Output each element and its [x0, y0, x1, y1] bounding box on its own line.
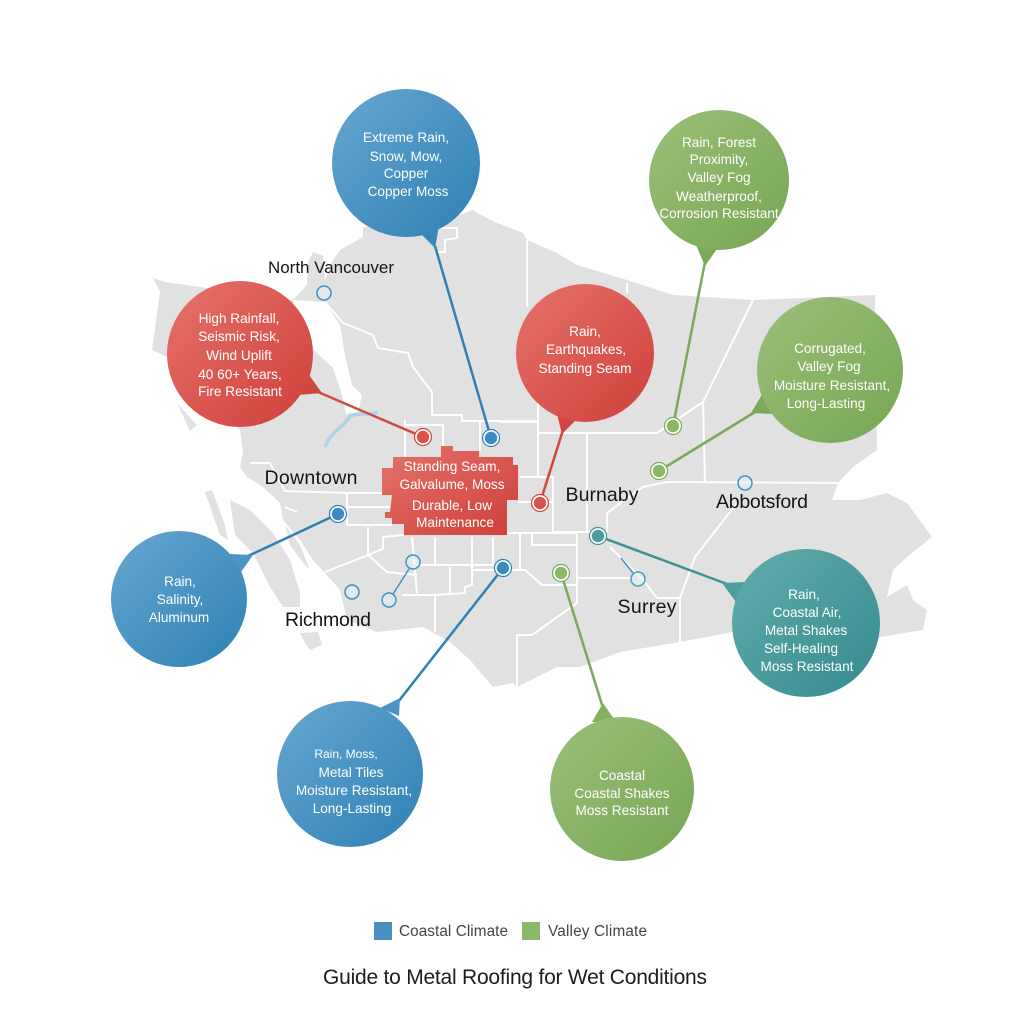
central red district callout: Galvalume, Moss: [399, 477, 505, 492]
bubble: left red: Seismic Risk,: [198, 329, 280, 344]
bubble: left red: Fire Resistant: [198, 384, 282, 399]
bubble: lower blue: Moisture Resistant,: [296, 783, 412, 798]
river: [325, 412, 378, 447]
road network: [250, 228, 840, 687]
bubble: top blue: Copper Moss: [368, 184, 449, 199]
bubble: left blue: Salinity,: [157, 592, 203, 607]
bubble: top blue: [332, 89, 500, 446]
bubble: middle red: Standing Seam: [539, 361, 631, 376]
place labels: Abbotsford: [716, 491, 808, 513]
bubble: top green: Corrosion Resistant: [659, 206, 779, 221]
strait and inlets: [293, 300, 362, 414]
bubble: lower green: Coastal: [599, 768, 645, 783]
central red district callout: Durable, Low: [412, 498, 492, 513]
bubble: left blue: Rain,: [164, 574, 196, 589]
bubble: lower green: [550, 564, 694, 861]
central red district callout: [382, 446, 518, 535]
place labels: Downtown: [264, 467, 358, 489]
islands: [177, 403, 322, 650]
bubble: middle red: [516, 284, 654, 512]
central red district callout: Standing Seam,: [404, 459, 500, 474]
bubble: lower green: Coastal Shakes: [574, 786, 670, 801]
bubble: teal: Metal Shakes: [765, 623, 847, 638]
bubble: teal: Rain,: [788, 587, 820, 602]
legend: Coastal Climate: [399, 923, 508, 940]
bubble: top green: Weatherproof,: [676, 189, 762, 204]
bubble: right green: Long-Lasting: [787, 396, 865, 411]
place labels: Burnaby: [566, 484, 639, 506]
bubble: lower blue: [277, 560, 512, 847]
bubble: lower blue: Metal Tiles: [319, 765, 384, 780]
bubble: top green: Proximity,: [690, 152, 748, 167]
place labels: Surrey: [618, 596, 677, 618]
place labels: [264, 258, 808, 631]
bubble: top green: Valley Fog: [687, 170, 751, 185]
bubble: left blue: [111, 506, 346, 667]
bubble: teal: Coastal Air,: [773, 605, 841, 620]
bubble: right green: Valley Fog: [797, 359, 861, 374]
bubble: left red: [167, 281, 432, 446]
legend: [374, 922, 647, 940]
bubble: right green: Corrugated,: [794, 341, 866, 356]
map: Metro Vancouver region: [152, 210, 932, 687]
bubble: middle red: Rain,: [569, 324, 601, 339]
bubble: top blue: Copper: [384, 166, 429, 181]
place labels: Richmond: [285, 609, 371, 631]
bubble: teal: Moss Resistant: [761, 659, 854, 674]
legend: Valley Climate: [548, 923, 647, 940]
bubble: lower green: Moss Resistant: [576, 803, 669, 818]
bubble: teal: [590, 528, 880, 697]
central red district callout: Maintenance: [416, 515, 494, 530]
unlinked open markers: [317, 286, 752, 607]
bubble: top green: [649, 110, 789, 434]
bubble: lower blue: Rain, Moss,: [314, 747, 378, 761]
bubble: top blue: Extreme Rain,: [363, 130, 449, 145]
bubble: left red: Wind Uplift: [206, 348, 272, 363]
bubble: lower blue: Long-Lasting: [313, 801, 391, 816]
bubble: middle red: Earthquakes,: [546, 342, 626, 357]
bubble: left red: High Rainfall,: [199, 311, 279, 326]
bubble: right green: [650, 297, 903, 480]
title: Guide to Metal Roofing for Wet Conditions: [323, 966, 707, 989]
bubble: left red: 40 60+ Years,: [198, 367, 282, 382]
bubble: top blue: Snow, Mow,: [370, 149, 442, 164]
place labels: North Vancouver: [268, 258, 394, 277]
bubble: left blue: Aluminum: [149, 610, 209, 625]
bubble: teal: Self-Healing: [764, 641, 838, 656]
bubble: top green: Rain, Forest: [682, 135, 756, 150]
bubble: right green: Moisture Resistant,: [774, 378, 890, 393]
